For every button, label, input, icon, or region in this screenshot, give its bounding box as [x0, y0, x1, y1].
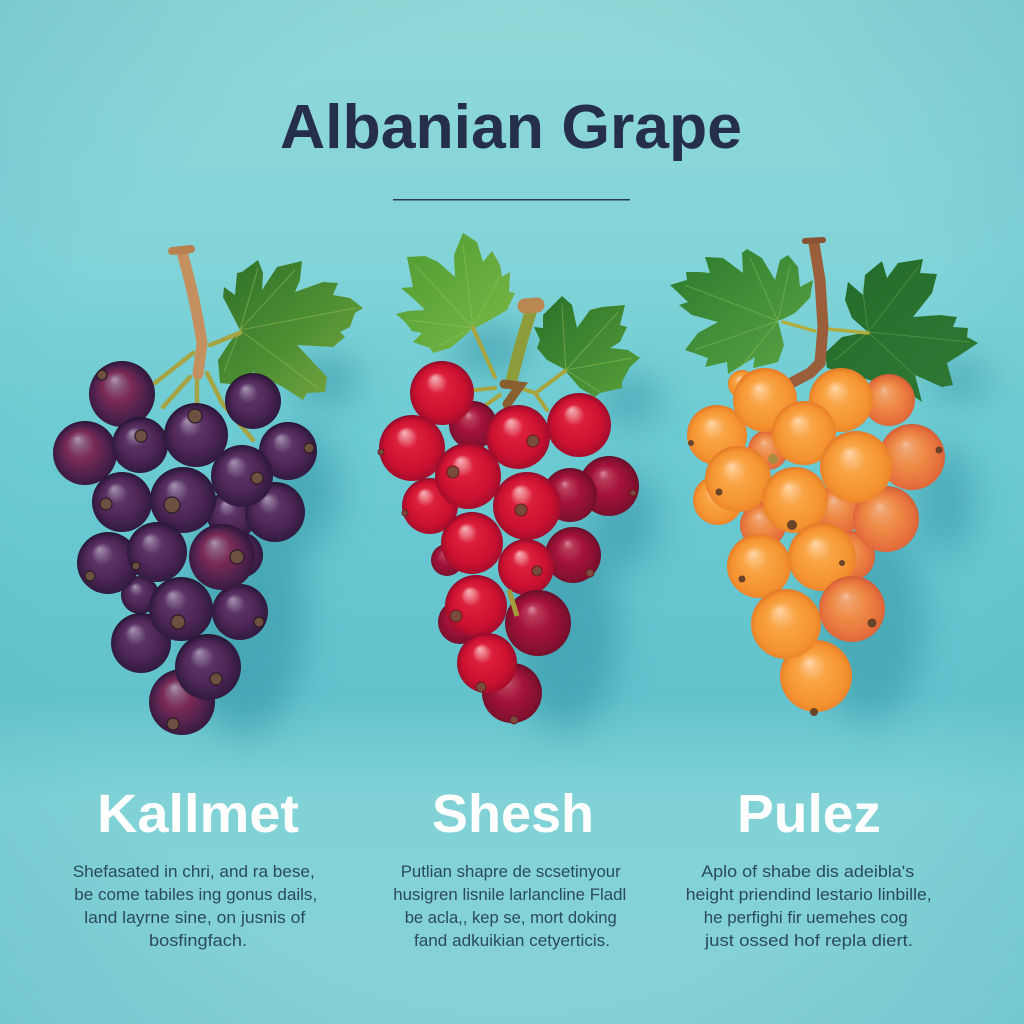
berries [53, 361, 317, 735]
stem [458, 305, 565, 425]
text block: Pulez description: Aplo of shabe dis adeibla's [701, 863, 914, 881]
berries [379, 361, 639, 723]
berry calyx marks [688, 440, 942, 716]
berry calyx marks [85, 370, 314, 730]
berries [687, 368, 945, 712]
heading: Pulez: Pulez [737, 784, 881, 844]
text block: Kallmet description: be come tabiles ing gonus dails, [74, 886, 317, 904]
stem [783, 240, 868, 382]
text block: Kallmet description: bosfingfach. [149, 932, 247, 950]
leaf right [825, 259, 978, 402]
cluster shadow [815, 358, 990, 720]
leaf right [534, 296, 640, 397]
text block: Pulez description: just ossed hof repla diert. [704, 932, 913, 950]
cluster shadow [183, 355, 360, 735]
text block: Pulez description: he perfighi fir uemehes cog [704, 909, 908, 927]
text block: Shesh description: fand adkuikian cetyerticis. [414, 932, 610, 950]
text block: Kallmet description: Shefasated in chri, and ra bese, [73, 863, 315, 881]
panel: Pulez grape cluster [670, 240, 990, 720]
panel: Kallmet grape cluster [53, 249, 363, 735]
leaf [218, 260, 363, 400]
leaf left [396, 233, 515, 353]
text block: Shesh description: husigren lisnile larlancline Fladl [393, 886, 626, 904]
panel: Shesh grape cluster [378, 233, 660, 730]
title divider [393, 199, 630, 200]
text block: Pulez description: height priendind lestario linbille, [686, 886, 932, 904]
text block: Shesh description: Putlian shapre de scsetinyour [401, 863, 621, 881]
cluster shadow [450, 325, 660, 730]
heading: Shesh: Shesh [432, 784, 594, 844]
berry calyx marks [378, 435, 636, 724]
text block: Shesh description: be acla,, kep se, mort doking [405, 909, 617, 927]
text block: Kallmet description: land layrne sine, on jusnis of [84, 909, 306, 927]
small stem [509, 590, 517, 616]
title: Albanian Grape [280, 93, 742, 162]
heading: Kallmet: Kallmet [97, 784, 299, 844]
leaf left [670, 249, 813, 374]
stem [155, 249, 253, 440]
